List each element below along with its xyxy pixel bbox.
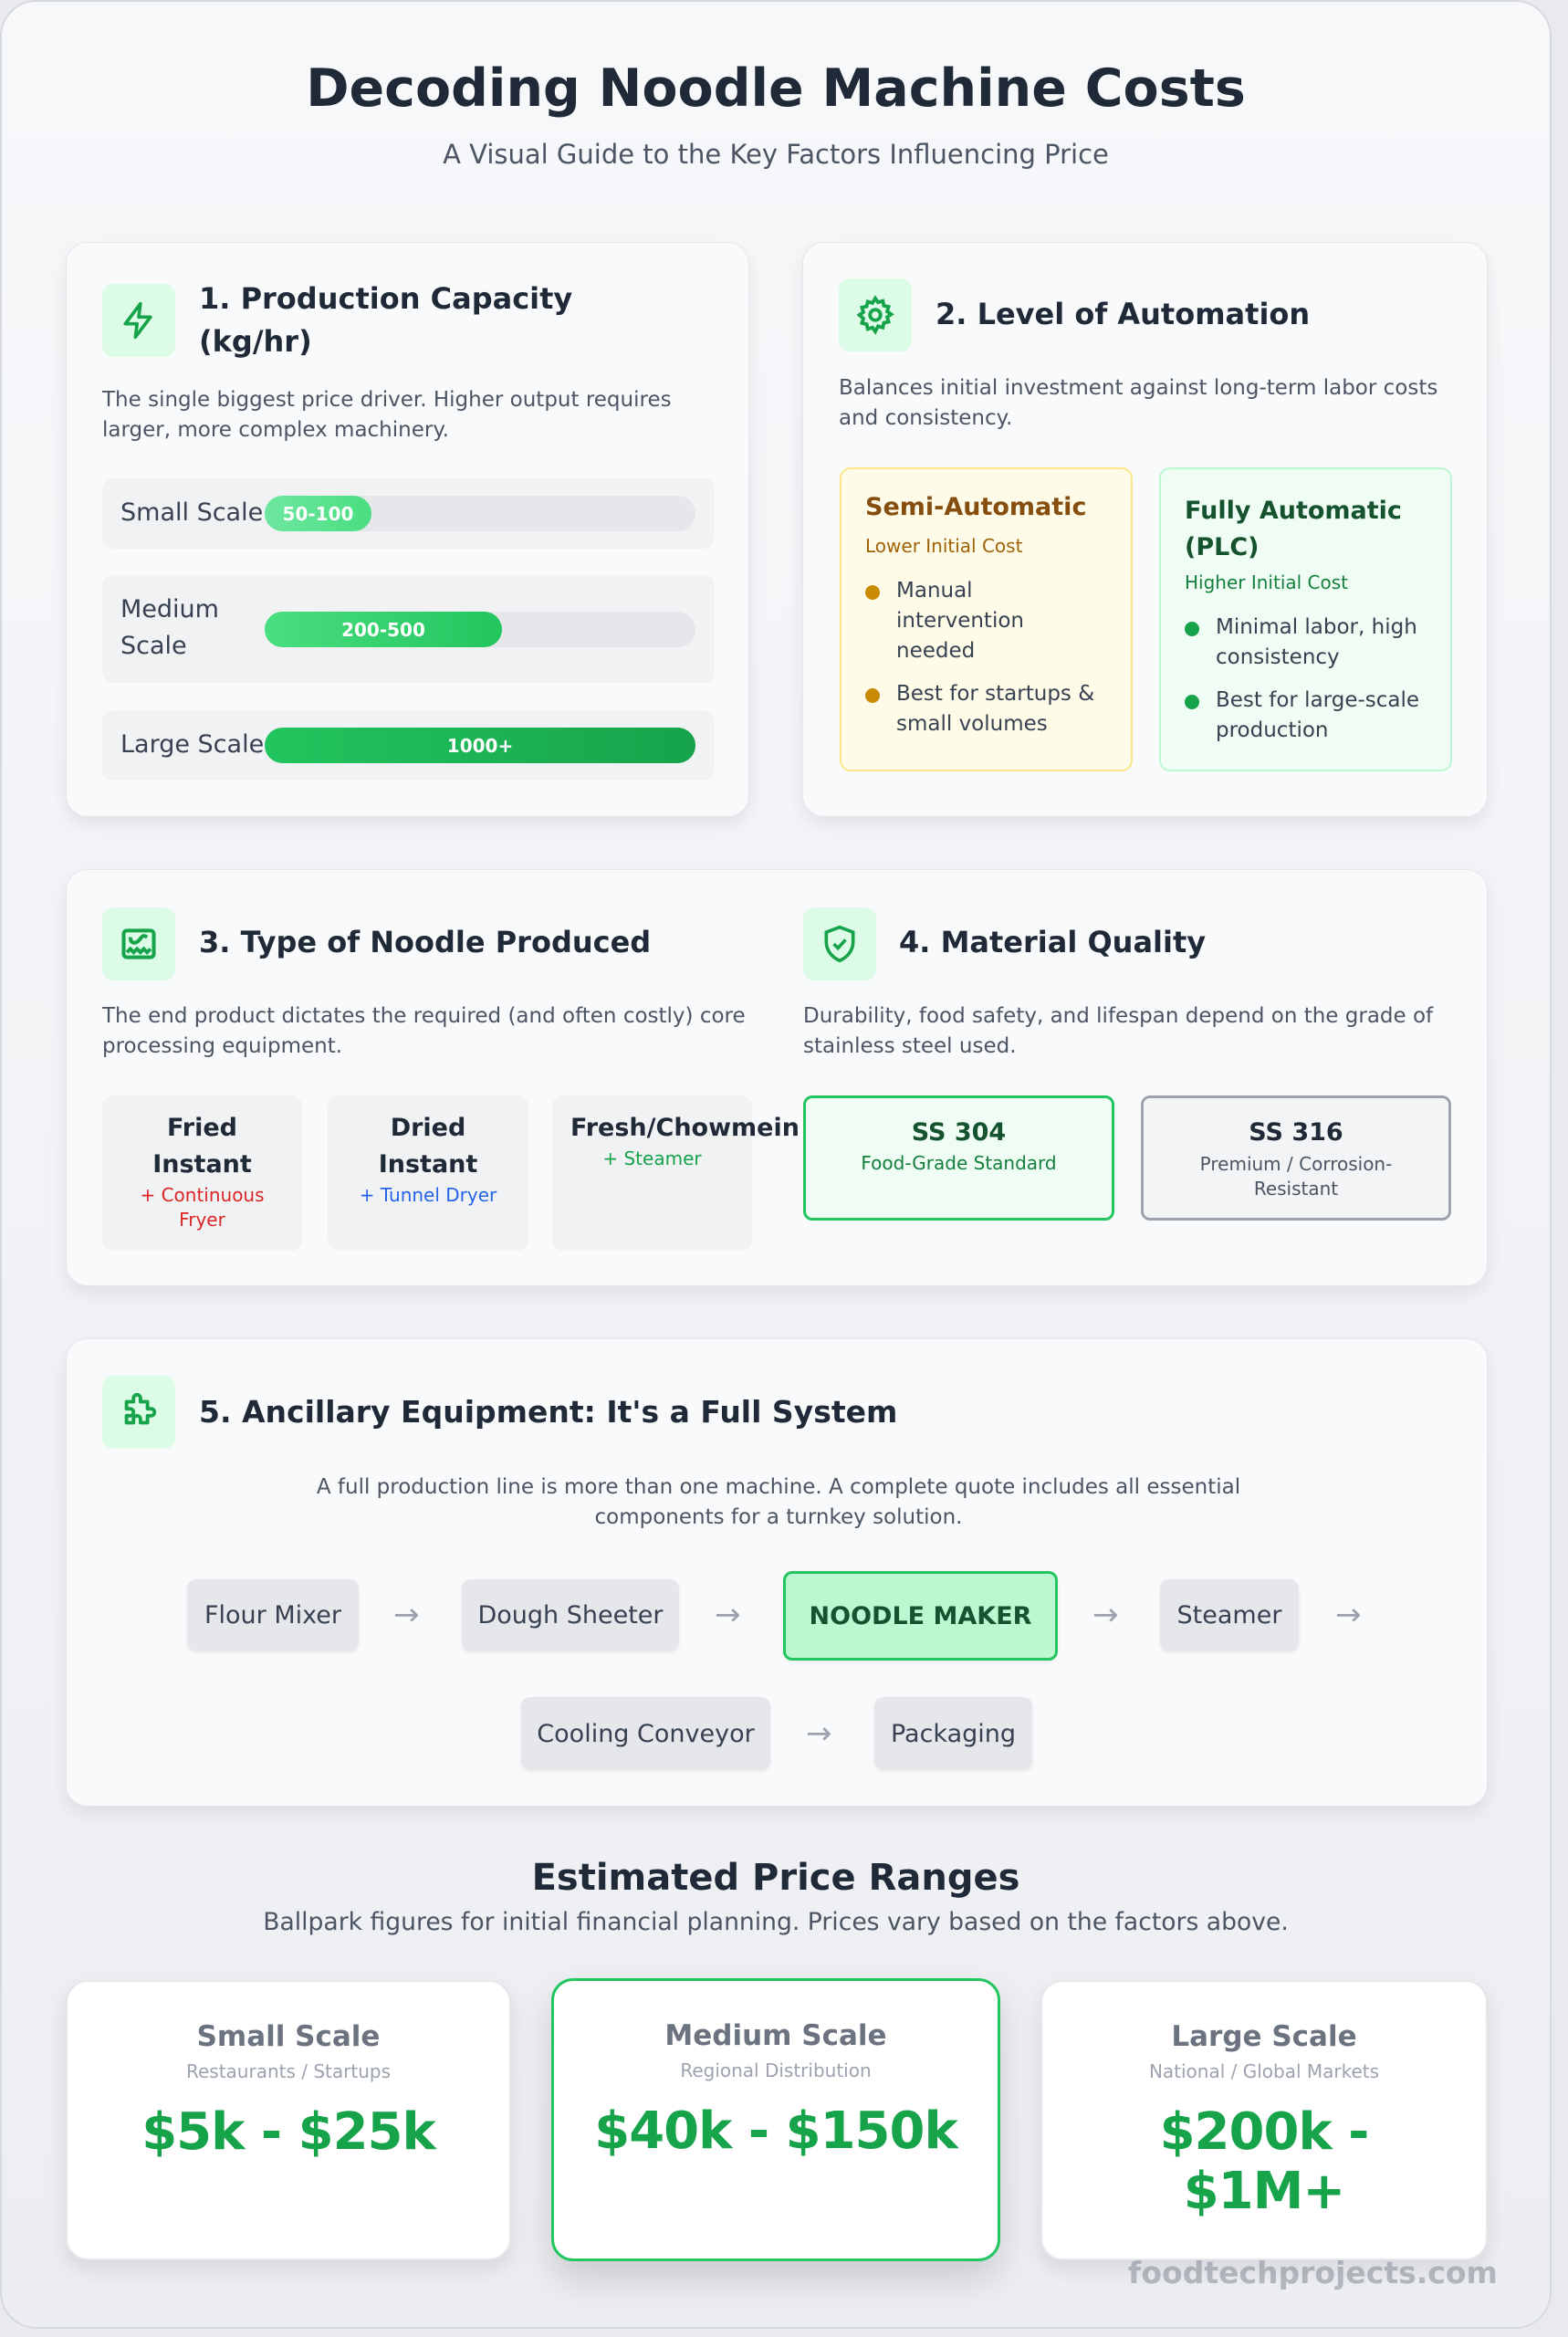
bar: large: 1000+ (447, 734, 513, 756)
heading: 1. Production Capacity (kg/hr) (199, 281, 572, 359)
price card: medium: Medium Scale (664, 2019, 887, 2052)
title: Decoding Noodle Machine Costs (306, 58, 1246, 119)
price card: medium (551, 1978, 1000, 2261)
bar: large (102, 710, 715, 781)
type boxes: Fresh/Chowmein (570, 1114, 800, 1142)
box: fully automatic: Fully Automatic (PLC) (1185, 497, 1402, 561)
bar: medium: Medium Scale (120, 595, 219, 660)
panel: production capacity (66, 242, 749, 817)
box: fully automatic (1159, 467, 1452, 771)
price card: small: Small Scale (197, 2020, 380, 2053)
bar: small (102, 478, 715, 549)
bar: medium: 200-500 (341, 619, 425, 641)
type boxes: Dried Instant (379, 1114, 477, 1179)
icon: noodle bowl (102, 907, 175, 980)
box: semi-automatic: Manual intervention needed (896, 579, 1024, 663)
flow diagram: → (1092, 1597, 1119, 1633)
flow diagram: → (715, 1597, 741, 1633)
price card: large: Large Scale (1171, 2020, 1357, 2053)
type boxes: + Tunnel Dryer (360, 1184, 497, 1206)
price card: medium: $40k - $150k (594, 2101, 957, 2161)
box: SS 304 (803, 1095, 1114, 1221)
description: The end product dictates the required (and often costly) core processing equipment. (102, 1004, 746, 1058)
icon: puzzle (102, 1376, 175, 1449)
type boxes: + Continuous Fryer (140, 1184, 265, 1231)
bar: small: Small Scale (120, 498, 263, 527)
heading: 3. Type of Noodle Produced (199, 925, 651, 959)
bar: small: 50-100 (283, 502, 353, 524)
price card: large (1040, 1980, 1488, 2260)
box: semi-automatic: Lower Initial Cost (865, 535, 1022, 557)
flow diagram: Steamer (1177, 1601, 1281, 1630)
heading: 2. Level of Automation (936, 297, 1310, 331)
price card: large: $200k - (1160, 2102, 1368, 2162)
box: fully automatic: Best for large-scale production (1216, 688, 1419, 742)
icon: gear (839, 278, 912, 351)
box: semi-automatic: Semi-Automatic (865, 493, 1086, 521)
price card: large: National / Global Markets (1149, 2060, 1379, 2082)
box: SS 316: Premium / Corrosion-Resistant (1200, 1153, 1392, 1200)
flow diagram: → (1335, 1597, 1362, 1633)
panel: noodle type and material (66, 869, 1488, 1286)
bar: medium (102, 575, 715, 683)
icon: shield (803, 907, 876, 980)
description: A full production line is more than one machine. A complete quote includes all essential components for a turnkey solution. (317, 1475, 1240, 1529)
heading: 4. Material Quality (899, 925, 1206, 959)
box: fully automatic: Higher Initial Cost (1185, 571, 1348, 593)
type boxes (140, 1114, 800, 1231)
box: SS 304: Food-Grade Standard (861, 1152, 1057, 1174)
flow diagram: → (806, 1715, 832, 1752)
subtitle: A Visual Guide to the Key Factors Influencing Price (443, 139, 1109, 170)
type boxes: Fried Instant (152, 1114, 252, 1179)
box: fully automatic: Minimal labor, high consistency (1216, 615, 1417, 669)
flow diagram: → (393, 1597, 420, 1633)
panel: ancillary equipment (66, 1338, 1488, 1807)
panel: automation (802, 242, 1488, 817)
type boxes: + Steamer (602, 1148, 702, 1169)
flow diagram (187, 1571, 1362, 1771)
heading: 5. Ancillary Equipment: It's a Full System (199, 1394, 897, 1430)
box: semi-automatic (840, 467, 1133, 771)
subtitle: price ranges: Ballpark figures for initial financial planning. Prices vary based on the factors above. (263, 1908, 1289, 1936)
box: SS 316 (1141, 1095, 1451, 1221)
flow diagram: Flour Mixer (204, 1601, 341, 1630)
bar: large: Large Scale (120, 730, 264, 759)
icon: lightning (102, 284, 175, 357)
box: semi-automatic: Best for startups & small volumes (896, 682, 1094, 736)
flow diagram: Cooling Conveyor (537, 1720, 755, 1747)
price card: medium: Regional Distribution (680, 2059, 872, 2081)
description: Balances initial investment against long-term labor costs and consistency. (839, 376, 1437, 430)
description: The single biggest price driver. Higher output requires larger, more complex machinery. (102, 388, 672, 442)
watermark: foodtechprojects.com (1128, 2255, 1498, 2290)
flow diagram: Packaging (891, 1720, 1016, 1747)
price card: small (66, 1980, 511, 2260)
flow diagram: NOODLE MAKER (810, 1601, 1031, 1630)
price card: large: $1M+ (1184, 2162, 1344, 2221)
heading: price ranges: Estimated Price Ranges (532, 1857, 1019, 1899)
box: SS 304: SS 304 (912, 1118, 1006, 1147)
price card: small: Restaurants / Startups (186, 2060, 391, 2082)
description: Durability, food safety, and lifespan depend on the grade of stainless steel used. (803, 1004, 1433, 1058)
price card: small: $5k - $25k (141, 2102, 435, 2162)
flow diagram: Dough Sheeter (477, 1601, 664, 1630)
box: SS 316: SS 316 (1249, 1118, 1343, 1147)
